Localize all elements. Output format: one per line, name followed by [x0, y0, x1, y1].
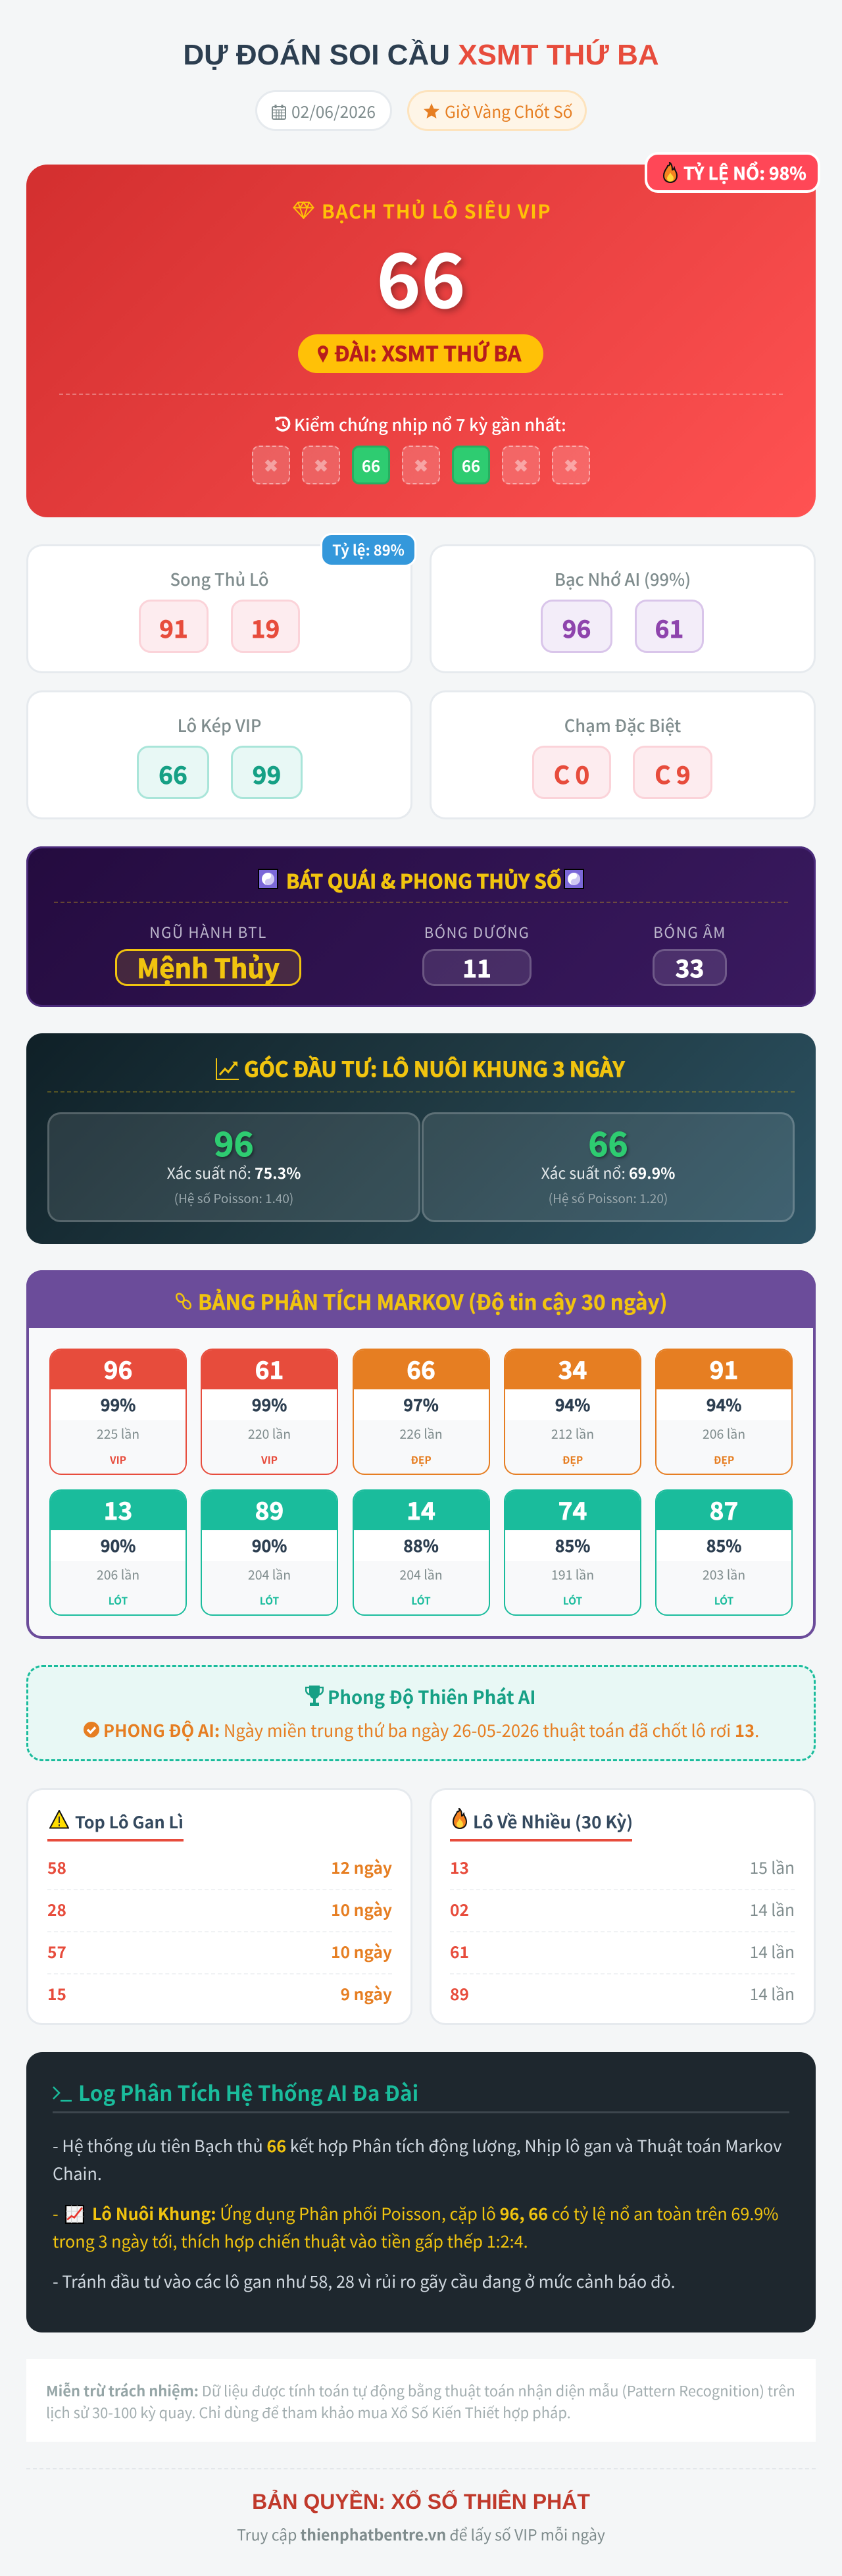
markov header	[26, 1270, 816, 1328]
station text: ĐÀI: XSMT THỨ BA	[334, 338, 521, 368]
row 13: 13	[450, 1856, 469, 1879]
log paragraph 2: - Lô Nuôi Khung: Ứng dụng Phân phối Poisson, cặp lô 96, 66 có tỷ lệ nổ an toàn trên 69.9%	[53, 2202, 779, 2225]
card 61	[201, 1348, 338, 1474]
number 61	[635, 600, 704, 653]
badge text: Tỷ lệ: 89%	[332, 539, 405, 560]
golden hour pill	[407, 90, 587, 131]
card 91: 206 lần	[703, 1423, 745, 1443]
disclaimer: Miễn trừ trách nhiệm: Dữ liệu được tính toán tự động bằng thuật toán nhận diện mẫu (Pattern Recognition) trên	[46, 2381, 795, 2401]
row 15: 15	[47, 1982, 66, 2005]
card 74: 85%	[555, 1533, 590, 1557]
column: bong am	[653, 921, 727, 986]
card 61: 220 lần	[248, 1423, 291, 1443]
panel: top lo gan	[26, 1788, 412, 2025]
log paragraph 1: Chain.	[53, 2161, 102, 2185]
disclaimer: lịch sử 30-100 kỳ quay. Chỉ dùng để tham khảo mua Xổ Số Kiến Thiết hợp pháp.	[46, 2402, 571, 2423]
poisson: (Hệ số Poisson: 1.20)	[549, 1189, 668, 1207]
row 28	[47, 1890, 392, 1932]
number 19	[231, 600, 300, 653]
heading text: Phong Độ Thiên Phát AI	[328, 1683, 535, 1709]
number 66: 66	[159, 756, 187, 791]
icon: terminal	[53, 2086, 72, 2102]
card 13	[49, 1489, 187, 1615]
result chips: ✖	[564, 453, 578, 477]
pill text: Giờ Vàng Chốt Số	[445, 100, 573, 123]
number 91	[139, 600, 209, 653]
panel: cham dac biet	[430, 690, 816, 819]
label: Lô Kép VIP	[178, 713, 261, 737]
row 13: 15 lần	[750, 1856, 795, 1879]
row 57: 57	[47, 1940, 66, 1963]
line text: PHONG ĐỘ AI: Ngày miền trung thứ ba ngày 26-05-2026 thuật toán đã chốt lô rơi 13.	[103, 1718, 759, 1742]
icon: warning	[49, 1810, 69, 1828]
card 61: 61	[255, 1351, 284, 1386]
card 14: 88%	[403, 1533, 439, 1557]
number 66	[137, 746, 209, 799]
heading text: Log Phân Tích Hệ Thống AI Đa Đài	[78, 2077, 418, 2107]
row 58	[47, 1848, 392, 1890]
poisson: (Hệ số Poisson: 1.40)	[174, 1189, 293, 1207]
row 61: 61	[450, 1940, 469, 1963]
panel: form callout	[26, 1665, 816, 1761]
card 14: 14	[407, 1491, 435, 1527]
card 91: 91	[710, 1351, 738, 1386]
result chips: ✖	[314, 453, 328, 477]
label: Bạc Nhớ AI (99%)	[555, 567, 691, 591]
label: BÓNG DƯƠNG	[424, 921, 530, 942]
value	[653, 949, 727, 986]
card 74: 191 lần	[551, 1564, 594, 1584]
icon: yin yang right	[564, 869, 584, 889]
log paragraph 2: trong 3 ngày tới, thích hợp chiến thuật vào tiền gấp thếp 1:2:4.	[53, 2229, 528, 2253]
result chips: 66	[362, 453, 380, 477]
callout heading	[305, 1683, 535, 1709]
disclaimer	[26, 2359, 816, 2442]
icon: trophy	[305, 1686, 324, 1706]
number 99: 99	[253, 756, 281, 791]
value: 11	[462, 949, 491, 985]
card 91: ĐẸP	[714, 1452, 734, 1466]
value C0	[532, 746, 611, 799]
card 74	[504, 1489, 641, 1615]
card 89: 89	[255, 1491, 284, 1527]
row 02: 02	[450, 1898, 469, 1921]
result chips: ✖	[264, 453, 278, 477]
date pill	[255, 90, 392, 131]
row 89: 14 lần	[750, 1982, 795, 2005]
card 96: VIP	[110, 1452, 126, 1466]
card 74: LÓT	[563, 1593, 582, 1607]
row 15	[47, 1982, 392, 2005]
card 89	[201, 1489, 338, 1615]
result chips: ✖	[414, 453, 428, 477]
row 28: 10 ngày	[331, 1898, 392, 1921]
value	[422, 949, 532, 986]
card 96	[49, 1348, 187, 1474]
card 89: 204 lần	[248, 1564, 291, 1584]
panel: lo kep vip	[26, 690, 412, 819]
card 74: 74	[558, 1491, 587, 1527]
card 89: 90%	[252, 1533, 287, 1557]
number 61: 61	[655, 609, 683, 645]
column: ngu hanh	[115, 921, 301, 986]
card 34: 34	[558, 1351, 587, 1386]
log paragraph 3: - Tránh đầu tư vào các lô gan như 58, 28 vì rủi ro gãy cầu đang ở mức cảnh báo đỏ.	[53, 2269, 676, 2293]
row 61: 14 lần	[750, 1940, 795, 1963]
result chips	[252, 446, 590, 484]
card 61: VIP	[261, 1452, 278, 1466]
heading	[258, 865, 584, 894]
row 58: 58	[47, 1856, 66, 1879]
card 96: 225 lần	[97, 1423, 139, 1443]
card 34	[504, 1348, 641, 1474]
card 61: 99%	[252, 1393, 287, 1416]
heading	[216, 1053, 625, 1083]
heading text: Top Lô Gan Lì	[75, 1810, 184, 1834]
icon: link	[176, 1293, 191, 1310]
row 57: 10 ngày	[331, 1940, 392, 1963]
number: 96	[214, 1118, 254, 1166]
card 34: 212 lần	[551, 1423, 594, 1443]
number 99	[231, 746, 303, 799]
markov title: BẢNG PHÂN TÍCH MARKOV (Độ tin cậy 30 ngày)	[198, 1287, 667, 1316]
number 91: 91	[159, 609, 188, 645]
heading text: BÁT QUÁI & PHONG THỦY SỐ	[286, 865, 562, 894]
panel: markov	[26, 1270, 816, 1639]
card 91	[655, 1348, 793, 1474]
card 89: LÓT	[260, 1593, 279, 1607]
row 61	[450, 1932, 795, 1974]
number 96: 96	[562, 609, 591, 645]
card 87: 85%	[706, 1533, 741, 1557]
card 14: LÓT	[411, 1593, 431, 1607]
main number: 66	[376, 221, 466, 330]
label: NGŨ HÀNH BTL	[149, 921, 267, 942]
badge text: TỶ LỆ NỔ: 98%	[683, 159, 806, 185]
investment option 66	[422, 1112, 795, 1222]
title: DỰ ĐOÁN SOI CẦU XSMT THỨ BA	[183, 39, 659, 71]
label: Song Thủ Lô	[170, 567, 269, 591]
card 66: 97%	[403, 1393, 439, 1416]
column: bong duong	[422, 921, 532, 986]
date text: 02/06/2026	[291, 100, 376, 123]
card 66: 66	[407, 1351, 435, 1386]
heading text: GÓC ĐẦU TƯ: LÔ NUÔI KHUNG 3 NGÀY	[244, 1053, 625, 1083]
card 87	[655, 1489, 793, 1615]
card 34: 94%	[555, 1393, 590, 1416]
badge: rate 89	[320, 533, 416, 567]
number 19: 19	[251, 609, 280, 645]
value C0: C 0	[554, 756, 589, 791]
investment option 96	[47, 1112, 420, 1222]
card 34: ĐẸP	[562, 1452, 583, 1466]
number 96	[541, 600, 612, 653]
label: BÓNG ÂM	[653, 921, 726, 942]
value: 33	[676, 949, 704, 985]
icon: gem	[293, 201, 314, 219]
verification heading	[275, 413, 566, 436]
station pill	[298, 334, 543, 373]
icon: yin yang left	[258, 869, 278, 889]
panel: hero	[26, 165, 816, 517]
heading	[47, 1808, 184, 1842]
value C9	[633, 746, 712, 799]
row 57	[47, 1932, 392, 1974]
row 58: 12 ngày	[331, 1856, 392, 1879]
label: Chạm Đặc Biệt	[564, 713, 681, 737]
value C9: C 9	[655, 756, 691, 791]
panel: song thu lo	[26, 544, 412, 673]
callout line	[84, 1718, 759, 1742]
icon: map pin	[318, 346, 328, 363]
icon: history	[275, 417, 291, 432]
card 13: 206 lần	[97, 1564, 139, 1584]
value: Mệnh Thủy	[137, 948, 280, 986]
log paragraph 2	[53, 2202, 779, 2253]
icon: chart	[216, 1058, 239, 1080]
row 89	[450, 1982, 795, 2005]
icon: calendar	[272, 105, 286, 120]
card 91: 94%	[706, 1393, 741, 1416]
panel: lo ve nhieu	[430, 1788, 816, 2025]
card 13: 13	[104, 1491, 132, 1527]
card 14: 204 lần	[399, 1564, 443, 1584]
row 15: 9 ngày	[341, 1982, 392, 2005]
card 66: ĐẸP	[410, 1452, 432, 1466]
card 13: 90%	[101, 1533, 136, 1557]
row 02: 14 lần	[750, 1898, 795, 1921]
heading text: BẠCH THỦ LÔ SIÊU VIP	[322, 197, 551, 224]
panel: investment	[26, 1033, 816, 1244]
number: 66	[588, 1118, 628, 1166]
result chips: ✖	[514, 453, 528, 477]
heading text: Lô Về Nhiều (30 Kỳ)	[473, 1809, 633, 1834]
panel: bat quai	[26, 846, 816, 1007]
card 87: 87	[710, 1491, 738, 1527]
heading	[450, 1808, 632, 1842]
icon: fire	[663, 162, 678, 183]
card 66: 226 lần	[399, 1423, 443, 1443]
card 87: LÓT	[714, 1593, 733, 1607]
icon: check	[84, 1722, 99, 1738]
panel: bac nho ai	[430, 544, 816, 673]
log paragraph 1	[53, 2134, 781, 2185]
card 96: 96	[104, 1351, 132, 1386]
card 13: LÓT	[109, 1593, 128, 1607]
log paragraph 1: - Hệ thống ưu tiên Bạch thủ 66 kết hợp Phân tích động lượng, Nhịp lô gan và Thuật toán Markov	[53, 2134, 781, 2157]
probability: Xác suất nổ: 75.3%	[167, 1161, 301, 1183]
footer subtitle: Truy cập thienphatbentre.vn để lấy số VIP mỗi ngày	[237, 2523, 605, 2545]
card 96: 99%	[101, 1393, 136, 1416]
result chips: 66	[462, 453, 480, 477]
row 02	[450, 1890, 795, 1932]
probability: Xác suất nổ: 69.9%	[541, 1161, 675, 1183]
icon: fire	[453, 1808, 467, 1829]
footer title: BẢN QUYỀN: XỔ SỐ THIÊN PHÁT	[252, 2490, 590, 2513]
verification text: Kiểm chứng nhịp nổ 7 kỳ gần nhất:	[294, 413, 566, 436]
log heading	[53, 2077, 789, 2113]
panel: ai log	[26, 2052, 816, 2332]
card 14	[353, 1489, 489, 1615]
card 66	[353, 1348, 489, 1474]
row 13	[450, 1848, 795, 1890]
row 89: 89	[450, 1982, 469, 2005]
hero heading	[293, 197, 551, 224]
badge: explosion rate	[645, 152, 820, 193]
icon: star	[424, 103, 439, 118]
card 87: 203 lần	[703, 1564, 745, 1584]
row 28: 28	[47, 1898, 66, 1921]
